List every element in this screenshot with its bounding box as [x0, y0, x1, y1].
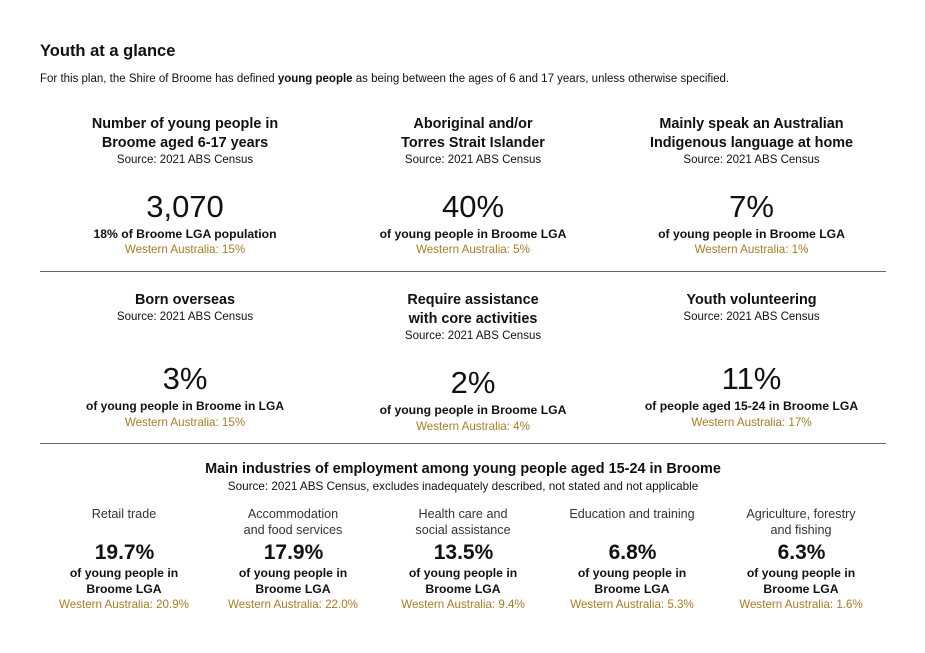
industry: health care: social assistance — [415, 523, 511, 537]
industry: health care: of young people in — [409, 566, 517, 580]
stat: Aboriginal and/or Torres Strait Islander: Source: 2021 ABS Census — [405, 154, 541, 166]
stat: youth volunteering: Youth volunteering — [686, 292, 817, 308]
industry: education: Broome LGA — [594, 582, 670, 596]
stat: number of young people: 18% of Broome LGA population — [93, 227, 277, 241]
industry: retail trade: of young people in — [70, 566, 178, 580]
stat: Aboriginal and/or Torres Strait Islander: Aboriginal and/or — [413, 116, 533, 132]
industry: accommodation and food: Accommodation — [248, 507, 338, 521]
stat: Australian Indigenous language: Source: 2021 ABS Census — [683, 154, 820, 166]
stat: Aboriginal and/or Torres Strait Islander: of young people in Broome LGA — [380, 227, 566, 241]
industry: retail trade: 19.7% — [95, 541, 154, 564]
stat: born overseas: of young people in Broome in LGA — [86, 399, 284, 413]
industry: agriculture: Western Australia: 1.6% — [739, 598, 863, 611]
industry: education — [569, 507, 695, 611]
stat: Aboriginal and/or Torres Strait Islander: Western Australia: 5% — [416, 243, 530, 256]
industry: health care: Health care and — [419, 507, 507, 521]
industry: health care: 13.5% — [434, 541, 493, 564]
stat: Australian Indigenous language: 7% — [729, 189, 774, 224]
industry: education: of young people in — [578, 566, 686, 580]
industry: agriculture: Broome LGA — [763, 582, 839, 596]
stat: youth volunteering — [645, 292, 858, 429]
stat: Australian Indigenous language: Mainly speak an Australian — [659, 116, 844, 132]
industry: accommodation and food: of young people in — [239, 566, 347, 580]
industry: accommodation and food: and food services — [244, 523, 342, 537]
industry: agriculture: and fishing — [771, 523, 831, 537]
industry: agriculture: of young people in — [747, 566, 855, 580]
stat: Australian Indigenous language: of young people in Broome LGA — [658, 227, 845, 241]
stat: Aboriginal and/or Torres Strait Islander: 40% — [442, 189, 504, 224]
employment source: Source: 2021 ABS Census, excludes inadequately described, not stated and not applicable — [228, 480, 698, 493]
stat: number of young people: Western Australia: 15% — [125, 243, 245, 256]
stat: require assistance: with core activities — [409, 311, 537, 327]
stat: require assistance: Require assistance — [407, 292, 539, 308]
stat: youth volunteering: 11% — [722, 361, 781, 396]
industry: agriculture: 6.3% — [778, 541, 825, 564]
title: Youth at a glance — [40, 42, 175, 60]
stat: born overseas — [86, 292, 284, 429]
industry: health care — [401, 507, 525, 611]
stat: Australian Indigenous language: Indigenous language at home — [650, 135, 853, 151]
stat: require assistance: 2% — [451, 365, 495, 400]
industry: accommodation and food — [228, 507, 358, 611]
stat: number of young people: Number of young people in — [92, 116, 278, 132]
stat: require assistance: Western Australia: 4% — [416, 420, 530, 433]
stat: born overseas: Western Australia: 15% — [125, 416, 245, 429]
industry: accommodation and food: 17.9% — [264, 541, 323, 564]
industry: retail trade — [59, 507, 189, 611]
stat: born overseas: Source: 2021 ABS Census — [117, 311, 253, 323]
stat: born overseas: 3% — [163, 361, 207, 396]
stat: Aboriginal and/or Torres Strait Islander — [380, 116, 566, 256]
stat: require assistance — [380, 292, 566, 433]
intro text: For this plan, the Shire of Broome has defined young people as being between the ages of 6 and 17 years, unless otherwise specified. — [40, 72, 729, 84]
stat: Aboriginal and/or Torres Strait Islander: Torres Strait Islander — [401, 135, 545, 151]
stat: number of young people — [92, 116, 278, 256]
stat: born overseas: Born overseas — [135, 292, 235, 308]
industry: retail trade: Western Australia: 20.9% — [59, 598, 189, 611]
industry: agriculture: Agriculture, forestry — [746, 507, 856, 521]
industry: retail trade: Broome LGA — [86, 582, 162, 596]
stat: require assistance: Source: 2021 ABS Census — [405, 330, 541, 342]
stat: number of young people: Broome aged 6-17 years — [102, 135, 268, 151]
stat: youth volunteering: Western Australia: 17% — [691, 416, 812, 429]
industry: education: Education and training — [569, 507, 695, 521]
stat: Australian Indigenous language — [650, 116, 853, 256]
industry: retail trade: Retail trade — [92, 507, 156, 521]
stat: number of young people: Source: 2021 ABS Census — [117, 154, 253, 166]
stat: require assistance: of young people in Broome LGA — [380, 403, 566, 417]
industry: agriculture — [739, 507, 863, 611]
industry: health care: Broome LGA — [425, 582, 501, 596]
stat: Australian Indigenous language: Western Australia: 1% — [695, 243, 808, 256]
employment heading: Main industries of employment among young people aged 15-24 in Broome — [205, 461, 721, 477]
industry: accommodation and food: Broome LGA — [255, 582, 331, 596]
industry: health care: Western Australia: 9.4% — [401, 598, 525, 611]
stat: youth volunteering: of people aged 15-24 in Broome LGA — [645, 399, 858, 413]
industry: education: 6.8% — [609, 541, 656, 564]
industry: accommodation and food: Western Australia: 22.0% — [228, 598, 358, 611]
stat: youth volunteering: Source: 2021 ABS Census — [683, 311, 820, 323]
industry: education: Western Australia: 5.3% — [570, 598, 694, 611]
stat: number of young people: 3,070 — [146, 189, 224, 224]
